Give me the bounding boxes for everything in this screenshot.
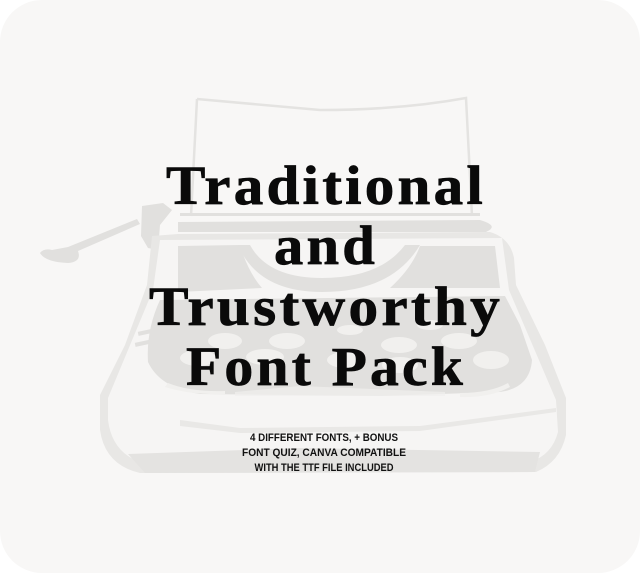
inner body highlight (108, 238, 558, 462)
upper left panel (178, 245, 262, 292)
paper sheet (191, 98, 472, 216)
keyboard well (148, 296, 532, 396)
upper right panel (390, 246, 500, 288)
keys (165, 320, 510, 397)
heading: title: Traditional (166, 155, 486, 216)
text block: subtitle: FONT QUIZ, CANVA COMPATIBLE (242, 447, 406, 459)
heading: title (149, 155, 503, 397)
carriage lever (40, 203, 172, 263)
platform base band (128, 448, 540, 473)
side vents (135, 328, 156, 347)
heading: title: Font Pack (186, 336, 466, 397)
platform top line (180, 408, 556, 433)
heading: title: Trustworthy (149, 276, 503, 337)
carriage and platen (178, 213, 492, 232)
center type-basket arch (238, 245, 420, 292)
text block: subtitle (242, 432, 406, 474)
typewriter body shell (100, 232, 566, 473)
icon: typewriter illustration (40, 98, 566, 473)
text block: subtitle: 4 DIFFERENT FONTS, + BONUS (250, 432, 398, 444)
text block: subtitle: WITH THE TTF FILE INCLUDED (254, 462, 394, 474)
heading: title: and (274, 215, 378, 276)
